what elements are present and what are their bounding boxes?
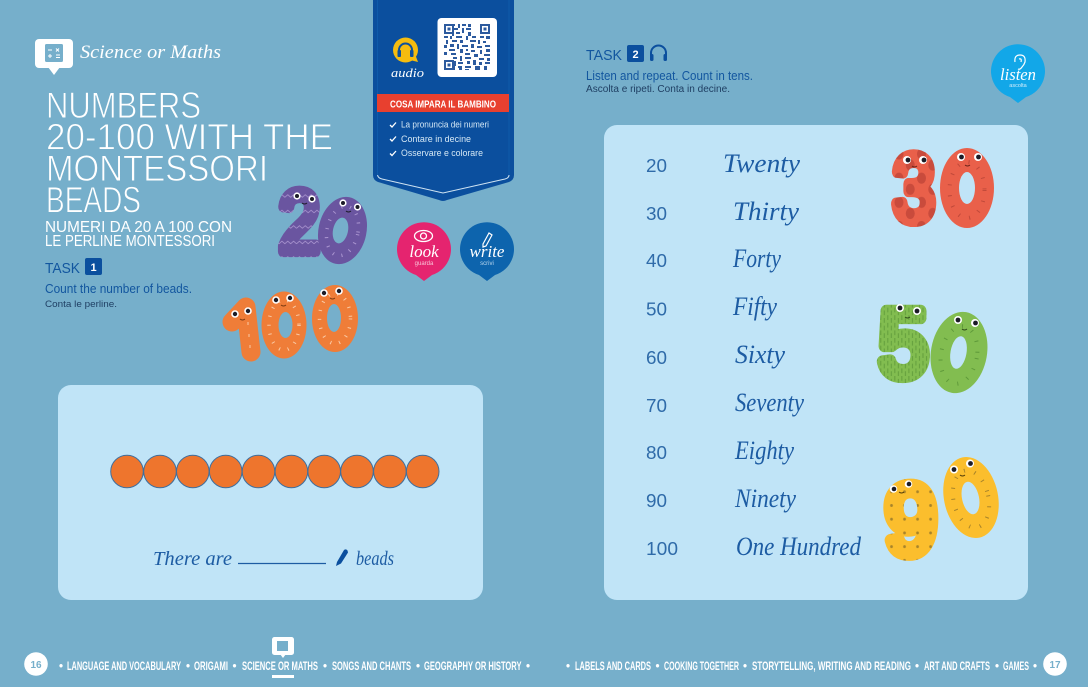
subtitle: NUMERI DA 20 A 100 CON [45,219,232,236]
footer navigation: left page: LANGUAGE AND VOCABULARY [67,661,181,673]
subtitle: LE PERLINE MONTESSORI [45,233,215,250]
badge: listen [991,44,1045,103]
task 2 heading: TASK [586,47,622,64]
footer navigation: right page [566,661,1037,673]
badge: look: look [409,242,439,261]
footer navigation: left page [59,661,530,673]
answer sentence: There are [153,548,232,570]
task 1 heading: 1 [90,262,97,274]
task 2 heading: 2 [632,49,639,61]
page number 16: 16 [30,660,42,671]
title: BEADS [46,180,141,220]
ribbon: audio and learning goals [373,0,514,201]
number words column: One Hundred [736,532,862,561]
badge: write: write [470,242,505,261]
number words column: Seventy [735,388,804,417]
page number 16 [24,652,48,676]
title: 20-100 WITH THE [46,116,333,158]
numerals column: 70 [646,396,667,416]
footer navigation: right page: • [566,661,570,673]
numerals column: 100 [646,539,678,559]
footer navigation: right page: ART AND CRAFTS [924,661,990,673]
badge: look: guarda [415,261,434,267]
number words column: Fifty [732,292,777,321]
section icon: calculator speech bubble [35,39,73,75]
icon: audio headphones [393,38,418,62]
page number 17 [1043,652,1067,676]
character: number 50 [879,291,994,398]
task 1 instruction: Count the number of beads. [45,281,192,296]
badge: write: scrivi [480,261,494,267]
red band: what the child learns [377,94,509,112]
bead bar of ten [111,455,439,488]
footer navigation: right page: STORYTELLING, WRITING AND READING [752,661,911,673]
footer navigation: left page: • [526,661,530,673]
footer navigation: right page: • [656,661,660,673]
numerals column: 90 [646,491,667,511]
footer navigation: left page: GEOGRAPHY OR HISTORY [424,661,522,673]
character: number 50: 5 [879,291,928,397]
footer navigation: right page: • [743,661,747,673]
footer navigation: left page: • [323,661,327,673]
audio label: audio [391,65,425,80]
badge: listen: ascolta [1009,83,1028,89]
page number 17: 17 [1049,660,1061,671]
badge: look [397,222,451,281]
answer sentence [153,548,394,570]
QR code [438,18,497,77]
title: NUMBERS [46,85,201,126]
numerals column: 80 [646,443,667,463]
footer navigation: left page: • [59,661,63,673]
footer navigation: right page: LABELS AND CARDS [575,661,651,673]
footer navigation: left page: • [232,661,237,673]
footer navigation: right page: • [995,661,999,673]
number words column: Thirty [733,197,799,226]
number words column: Forty [732,244,781,273]
section label: Science or Maths [80,42,221,63]
task 2 instruction: Listen and repeat. Count in tens. [586,68,753,83]
number words column: Sixty [735,340,785,369]
footer navigation: right page: • [915,661,919,673]
subtitle [45,219,232,250]
character: number 20: 2 [279,174,320,270]
numerals column [646,156,678,559]
character: number 20 [279,174,373,270]
task 1 heading [45,258,102,277]
character: number 90 [885,452,1006,575]
numerals column: 30 [646,204,667,224]
numerals column: 60 [646,348,667,368]
footer active section marker [272,637,294,678]
red band: what the child learns: COSA IMPARA IL BAMBINO [390,98,496,110]
checklist: Contare in decine [401,134,471,144]
footer navigation: left page: SONGS AND CHANTS [332,661,411,673]
task 1 heading: TASK [45,260,80,277]
character: number 100 [231,285,358,358]
footer navigation: left page: ORIGAMI [194,661,228,673]
panel: bead counting [58,385,483,600]
title: MONTESSORI [46,148,268,189]
number words column: Ninety [734,484,796,513]
numerals column: 50 [646,300,667,320]
number words column: Eighty [734,436,794,465]
task 2 heading [586,45,667,64]
footer navigation: right page: COOKING TOGETHER [664,661,739,673]
task 1 translation: Conta le perline. [45,299,117,310]
task 2 translation: Ascolta e ripeti. Conta in decine. [586,84,730,95]
badge: listen: listen [1000,65,1036,84]
panel: numbers in tens [604,125,1028,600]
answer sentence: beads [356,548,394,570]
footer navigation: left page: • [186,661,190,673]
checklist: La pronuncia dei numeri [401,120,489,130]
character: number 90: 9 [885,466,937,575]
badge: write [460,222,514,281]
character: number 30: 3 [893,136,935,240]
checklist [390,120,489,158]
number words column: Twenty [723,149,800,178]
numerals column: 20 [646,156,667,176]
footer navigation: right page: • [1033,661,1037,673]
number words column [723,149,862,561]
footer navigation: left page: • [416,661,420,673]
title [46,85,333,220]
footer navigation: left page: SCIENCE OR MATHS [242,661,318,673]
checklist: Osservare e colorare [401,148,483,158]
numerals column: 40 [646,251,667,271]
character: number 30 [893,136,994,240]
footer navigation: right page: GAMES [1003,661,1029,673]
